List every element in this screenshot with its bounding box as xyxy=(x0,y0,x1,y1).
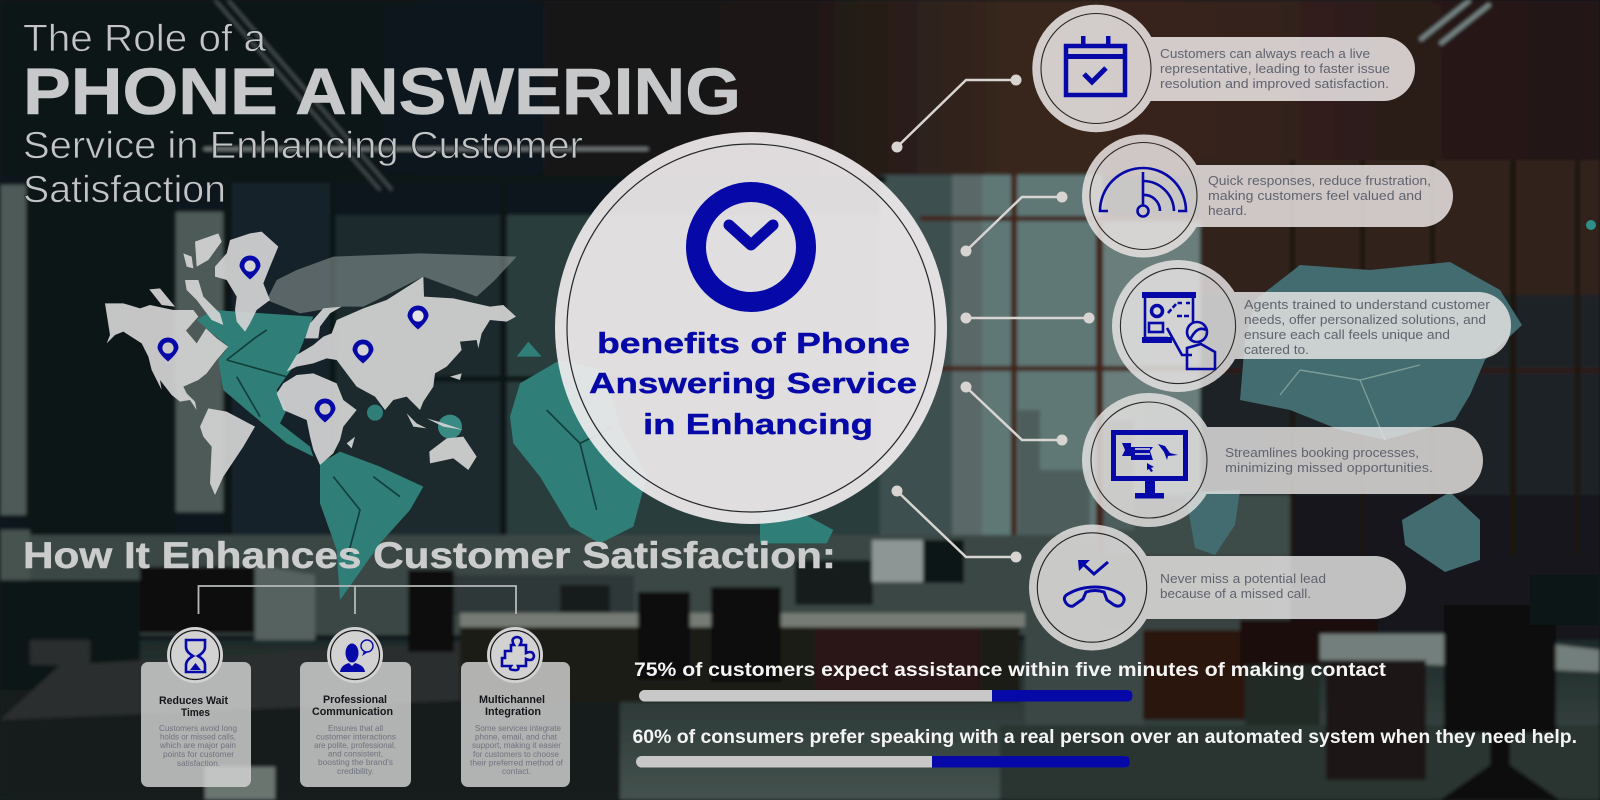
card body: satisfaction. xyxy=(177,759,220,768)
benefit 5 text: because of a missed call. xyxy=(1160,586,1311,601)
connector 5 xyxy=(892,486,1022,562)
card body: and consistent, xyxy=(328,750,383,758)
card body xyxy=(314,724,396,776)
title: PHONE ANSWERING xyxy=(23,54,741,128)
card body: for customers to choose xyxy=(473,750,560,759)
icon: pin xyxy=(240,256,260,280)
icon: pin xyxy=(408,306,428,330)
panel: central benefits circle xyxy=(555,132,947,524)
card body: holds or missed calls, xyxy=(160,732,236,742)
card title xyxy=(159,695,228,719)
central heading: Answering Service xyxy=(589,368,917,400)
card body: Customers avoid long xyxy=(159,724,237,733)
card title: Reduces Wait xyxy=(159,695,228,707)
connector 2 xyxy=(960,192,1068,256)
icon: booking monitor xyxy=(1114,432,1186,498)
benefit 4 text: minimizing missed opportunities. xyxy=(1225,460,1433,475)
progress bar 60 xyxy=(636,756,1130,768)
benefit 4 text xyxy=(1225,445,1433,475)
panel: benefit 4 booking xyxy=(1082,393,1483,527)
benefit 1 text xyxy=(1160,46,1390,91)
bracket connector xyxy=(198,586,516,614)
icon: puzzle piece xyxy=(502,637,534,670)
card body: which are major pain xyxy=(159,741,236,750)
icon: pin xyxy=(314,398,336,422)
benefit 2 text: making customers feel valued and xyxy=(1208,188,1422,203)
benefit 2 text: heard. xyxy=(1208,203,1247,218)
card body: Ensures that all xyxy=(328,724,383,733)
card title: Integration xyxy=(485,706,541,718)
panel: reduces wait times xyxy=(141,627,251,787)
card body: boosting the brand's xyxy=(318,758,393,767)
teal background world map xyxy=(197,253,833,600)
title: Satisfaction xyxy=(23,169,226,211)
card body: contact. xyxy=(502,767,531,776)
title: Service in Enhancing Customer xyxy=(23,125,583,167)
icon: pin xyxy=(352,340,374,364)
card body: credibility. xyxy=(337,767,374,776)
panel: benefit 5 missed calls xyxy=(1029,524,1406,650)
connector 1 xyxy=(892,74,1022,152)
card body: points for customer xyxy=(163,750,234,759)
card title: Multichannel xyxy=(479,694,545,706)
benefit 1 text: resolution and improved satisfaction. xyxy=(1160,76,1389,91)
card title xyxy=(479,694,545,718)
card body xyxy=(470,724,564,776)
connector 4 xyxy=(960,382,1068,446)
central heading: benefits of Phone xyxy=(597,328,910,360)
icon: hourglass xyxy=(186,640,205,672)
floor and furniture xyxy=(0,535,1100,635)
benefit 4 text: Streamlines booking processes, xyxy=(1225,445,1419,460)
icon: trainer at board xyxy=(1142,292,1215,369)
title: The Role of a xyxy=(23,18,267,60)
benefit 3 text: needs, offer personalized solutions, and xyxy=(1244,312,1486,327)
icon: calendar xyxy=(1066,36,1125,95)
card body: support, making it easier xyxy=(472,741,561,750)
card body: are polite, professional, xyxy=(314,741,396,750)
world map with location pins xyxy=(105,232,516,495)
panel: professional communication xyxy=(300,627,411,787)
panel: benefit 1 live representative xyxy=(1032,5,1415,132)
benefit 5 text: Never miss a potential lead xyxy=(1160,571,1326,586)
central heading xyxy=(589,328,917,441)
benefit 1 text: representative, leading to faster issue xyxy=(1160,61,1390,76)
city silhouette xyxy=(1018,410,1134,560)
benefit 5 text xyxy=(1160,571,1326,601)
card body: Some services integrate xyxy=(475,724,562,733)
icon: agent with speech bubble xyxy=(340,640,373,672)
card body xyxy=(159,724,237,768)
stat: 75 percent xyxy=(634,660,1387,702)
section heading: How It Enhances Customer Satisfaction: xyxy=(23,535,836,576)
benefit 2 text xyxy=(1208,173,1431,218)
teal background Asia map xyxy=(1185,220,1596,572)
benefit 3 text xyxy=(1244,297,1491,357)
panel: benefit 2 quick responses xyxy=(1082,134,1453,258)
icon: pin xyxy=(158,338,178,362)
benefit 2 text: Quick responses, reduce frustration, xyxy=(1208,173,1431,188)
card title: Communication xyxy=(312,706,393,718)
benefit 1 text: Customers can always reach a live xyxy=(1160,46,1370,61)
card title: Times xyxy=(181,707,210,719)
card body: phone, email, and chat xyxy=(475,732,558,742)
benefit 3 text: Agents trained to understand customer xyxy=(1244,297,1491,312)
card title: Professional xyxy=(323,694,387,706)
connector 3 xyxy=(960,312,1094,324)
stat: 60 percent xyxy=(632,727,1577,768)
stat: 75 percent: 75% of customers expect assistance within five minutes of making contact xyxy=(634,660,1387,681)
benefit 3 text: ensure each call feels unique and xyxy=(1244,327,1450,342)
icon: clock xyxy=(696,192,806,302)
card body: customer interactions xyxy=(316,732,396,742)
stat: 60 percent: 60% of consumers prefer speaking with a real person over an automated system when they need help. xyxy=(632,727,1577,748)
panel: multichannel integration xyxy=(461,627,570,787)
title xyxy=(23,18,741,211)
card title xyxy=(312,694,393,718)
icon: missed call phone xyxy=(1064,560,1124,606)
card body: their preferred method of xyxy=(470,758,564,768)
central heading: in Enhancing xyxy=(643,409,873,441)
panel: benefit 3 trained agents xyxy=(1112,260,1511,392)
benefit 3 text: catered to. xyxy=(1244,342,1309,357)
icon: gauge xyxy=(1100,168,1186,216)
progress bar 75 xyxy=(639,690,1132,702)
